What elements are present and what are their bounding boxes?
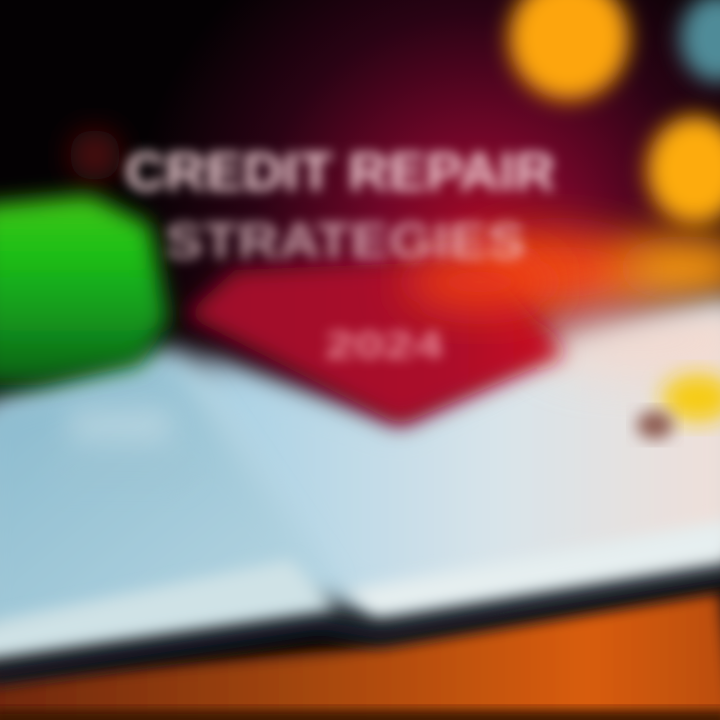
bokeh light: teal <box>680 0 720 82</box>
book shadow <box>0 560 720 685</box>
dark reflection beside the small light <box>637 411 673 439</box>
bright red orange highlight <box>405 254 555 310</box>
peach haze on right page <box>530 304 720 376</box>
title text: CREDIT REPAIR <box>125 142 555 202</box>
title text <box>125 142 555 269</box>
yellow small light <box>662 374 720 422</box>
book right page edge <box>345 520 720 616</box>
bokeh light: amber lower <box>615 236 720 300</box>
open book <box>0 300 720 660</box>
book base tying the pages together <box>0 300 720 640</box>
faint left page text <box>50 410 190 485</box>
card label: 2024 <box>325 325 443 367</box>
dark strip along the table's lower edge <box>0 710 720 720</box>
book left page edge <box>0 560 335 660</box>
book left page <box>0 355 330 640</box>
green object <box>0 195 168 385</box>
orange haze on the right <box>465 232 655 312</box>
red diamond card <box>185 262 565 425</box>
bokeh light: large orange <box>509 0 629 100</box>
book right page <box>200 305 720 600</box>
table surface <box>0 590 720 720</box>
bokeh light: yellow orange <box>647 116 720 224</box>
small red glow left of title <box>69 129 121 181</box>
title text: STRATEGIES <box>165 213 525 269</box>
